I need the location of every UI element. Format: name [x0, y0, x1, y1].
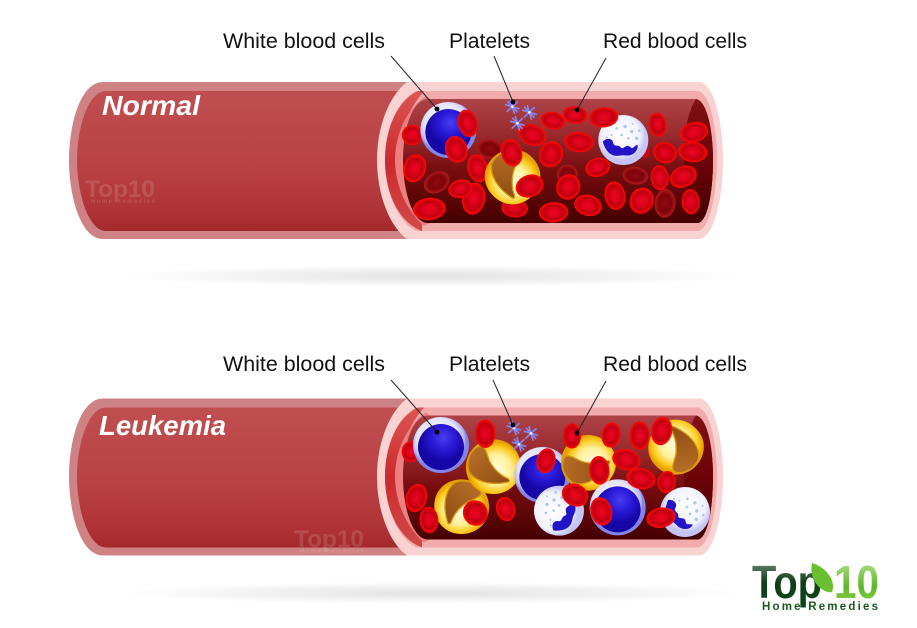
pointer: platelets: [494, 56, 515, 104]
platelets: [506, 100, 536, 130]
labels and pointers: leukemia: [223, 353, 747, 435]
enlarged lymphocyte: [514, 447, 570, 503]
blood cells: leukemia: [402, 409, 720, 547]
watermark: leukemia: Home Remedies: [300, 549, 365, 555]
pointer: white blood cells: [391, 380, 439, 434]
enlarged lymphocyte: [413, 417, 469, 473]
enlarged yellow cell: [432, 477, 491, 536]
pointer: platelets: [493, 380, 515, 427]
label: Platelets: Platelets: [449, 353, 530, 376]
logo word: 10: 10: [834, 556, 879, 608]
label: White blood cells: White blood cells: [223, 353, 385, 376]
watermark: normal: Top10: [85, 176, 155, 203]
abnormal granulocyte: [650, 477, 720, 547]
label: White blood cells: White blood cells: [223, 30, 385, 53]
title: Leukemia: Leukemia: [99, 410, 226, 441]
watermark: leukemia: Top10: [294, 526, 364, 553]
labels and pointers: normal: [223, 30, 747, 112]
white blood cell: granulocyte: [598, 115, 648, 165]
watermark: normal: Home Remedies: [91, 199, 156, 205]
shadow: normal vessel: [120, 265, 744, 287]
shadow: leukemia vessel: [120, 582, 744, 604]
platelets: [507, 421, 538, 451]
enlarged yellow cell: [638, 409, 714, 485]
enlarged yellow cell: [550, 424, 627, 501]
white blood cell: lymphocyte: [420, 102, 476, 158]
label: Red blood cells: Red blood cells: [603, 30, 747, 53]
vessel tube: normal: [69, 82, 723, 239]
pointer: red blood cells: [575, 381, 606, 435]
abnormal granulocyte: [527, 479, 591, 543]
vessel tube: leukemia: [69, 398, 723, 556]
panel: leukemia blood vessel: [69, 398, 723, 556]
icon: leaf: [811, 563, 833, 592]
logo tagline: Home Remedies: [762, 601, 878, 613]
panel: normal blood vessel: [69, 82, 723, 239]
label: Red blood cells: Red blood cells: [603, 353, 747, 376]
pointer: white blood cells: [391, 56, 439, 111]
pointer: red blood cells: [575, 58, 606, 112]
white blood cell: neutrophil yellow: [474, 138, 551, 215]
enlarged yellow cell: [466, 439, 521, 494]
enlarged lymphocyte: [590, 479, 646, 535]
label: Platelets: Platelets: [449, 30, 530, 53]
logo word: Top: Top: [752, 556, 822, 608]
title: Normal: Normal: [102, 90, 201, 121]
blood cells: normal: [400, 100, 710, 223]
logo: Top 10 Home Remedies: [752, 556, 879, 613]
